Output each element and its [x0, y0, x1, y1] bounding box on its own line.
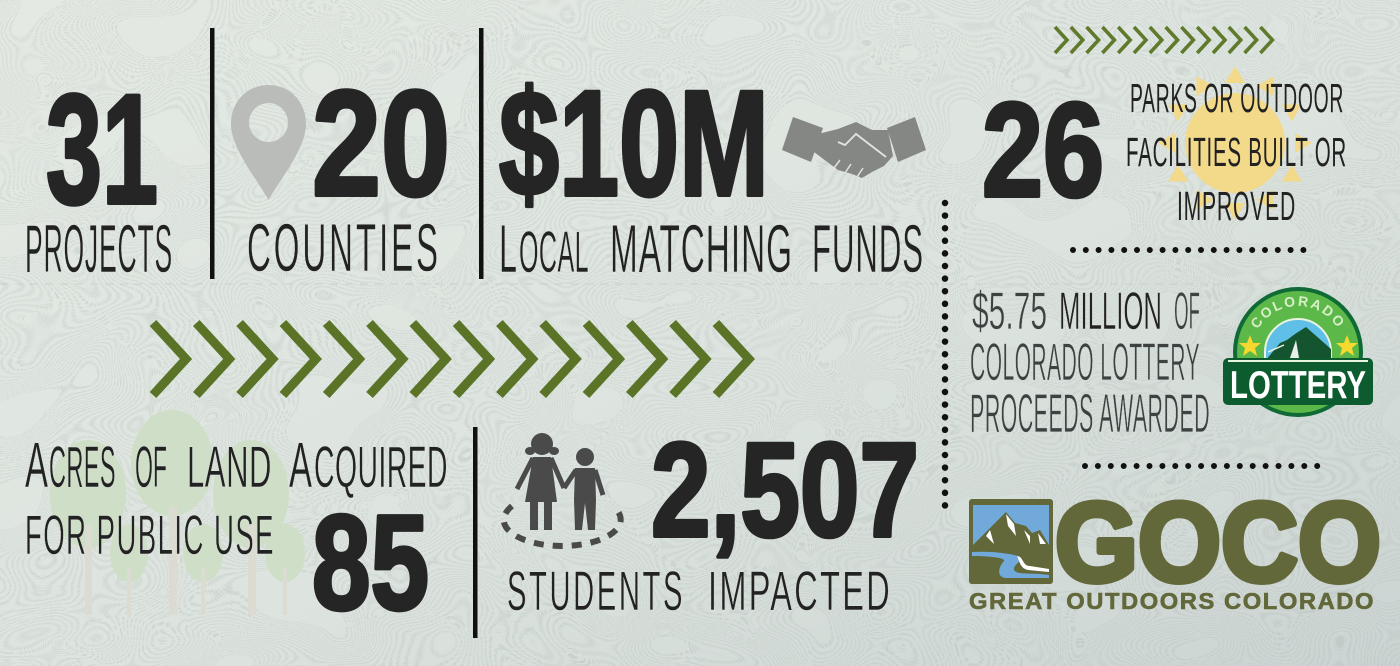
divider bar 1 [210, 28, 214, 279]
text: lottery proceeds: $5.75 [972, 282, 1047, 341]
icon: sun [1158, 66, 1312, 220]
text: OF [1174, 282, 1200, 341]
text: FUNDS [812, 211, 924, 287]
stat: 26 parks or outdoor facilities: 26 [982, 76, 1104, 225]
stat: 31 projects [25, 63, 173, 287]
logo: GOCO: GREAT OUTDOORS COLORADO [969, 588, 1375, 614]
divider bar 2 [479, 28, 484, 279]
stat: 20 counties: 20 [312, 59, 450, 227]
text: lottery proceeds [970, 282, 1210, 444]
text: lottery proceeds: MILLION [1059, 282, 1162, 341]
stat: 31 projects: 31 [46, 63, 158, 237]
stat: $10M local matching funds: $10M [499, 59, 769, 227]
stat: 85 acres of land: OF [135, 435, 167, 500]
logo: Colorado Lottery: COLORADO [1252, 296, 1344, 328]
stat: 85 acres of land [25, 429, 448, 638]
stat: 20 counties [247, 59, 450, 286]
chevron row: small [1055, 27, 1272, 53]
logo: GOCO: GOCO [1055, 480, 1381, 605]
chevron row: large [153, 323, 749, 395]
icon: mountain and river [969, 499, 1053, 584]
logo: Colorado Lottery [1223, 287, 1373, 417]
vertical dotted divider [942, 203, 948, 506]
stat: $10M local matching funds: OCAL [519, 220, 589, 285]
icon: trees [50, 410, 305, 615]
stat: 2,507 students impacted [507, 416, 919, 622]
stat: 85 acres of land: FOR PUBLIC USE [25, 503, 275, 566]
dotted divider: lower right [1085, 463, 1318, 469]
stat: 85 acres of land: CRES [49, 435, 116, 500]
stat: $10M local matching funds: L [499, 211, 517, 287]
icon: children in a circle [504, 433, 621, 546]
stat: 20 counties: COUNTIES [247, 210, 441, 286]
icon: handshake [782, 117, 926, 178]
stat: 2,507 students impacted: 2,507 [651, 416, 919, 565]
stat: 2,507 students impacted: IMPACTED [708, 559, 892, 622]
stat: $10M local matching funds [499, 59, 924, 287]
stat: 2,507 students impacted: STUDENTS [507, 559, 685, 622]
text: PROJECTS [25, 211, 173, 287]
icon: map pin [231, 85, 306, 200]
stat: 26 parks or outdoor facilities [982, 75, 1347, 229]
stat: 85 acres of land: A [289, 429, 312, 501]
stat: 85 acres of land: LAND [187, 435, 272, 500]
stat: $10M local matching funds: MATCHING [610, 211, 793, 287]
divider bar 3 [473, 427, 478, 638]
dotted divider: upper right [1073, 247, 1304, 253]
text: CQUIRED [314, 435, 448, 500]
stat: 85 acres of land: 85 [312, 487, 429, 638]
stat: 85 acres of land: A [25, 429, 48, 501]
